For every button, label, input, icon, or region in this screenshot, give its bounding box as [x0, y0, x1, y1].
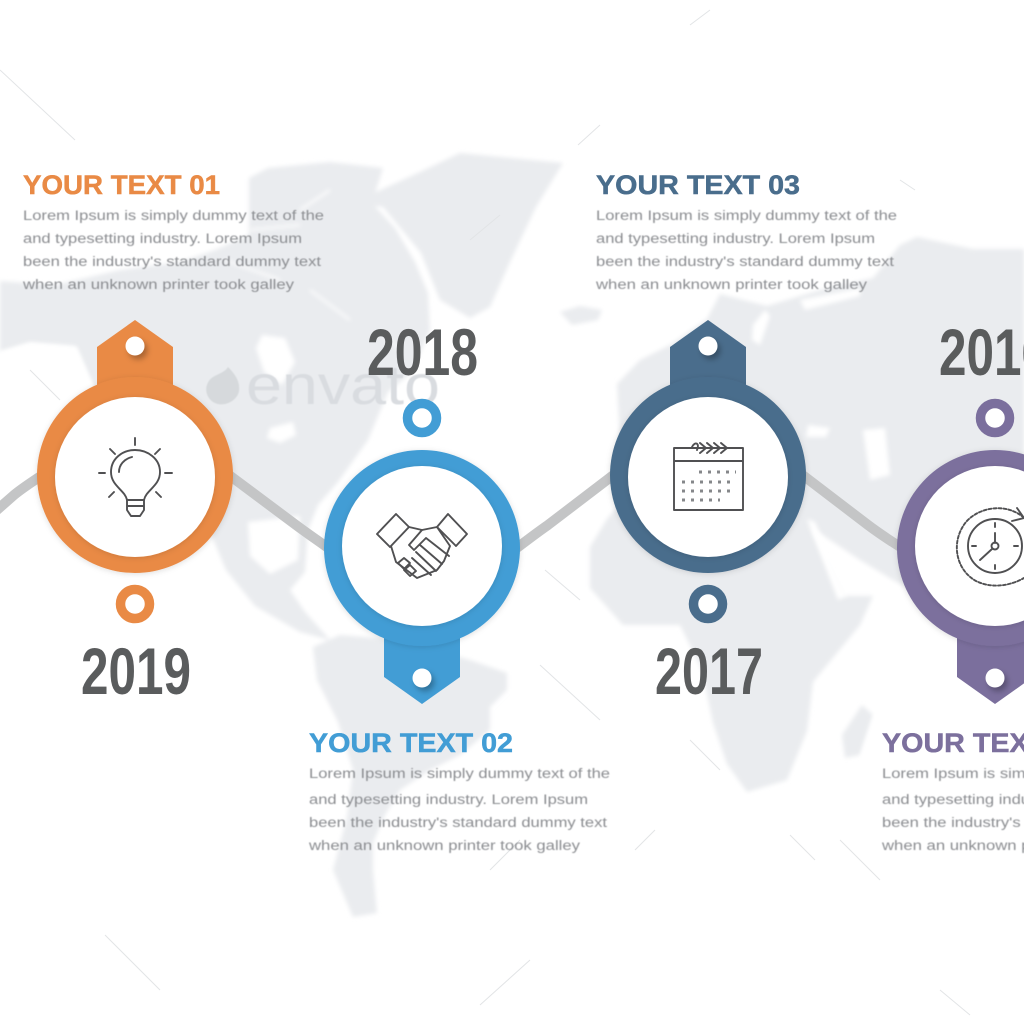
icon: light bulb: [99, 438, 172, 516]
tag hole: [412, 668, 432, 688]
map: iceland: [560, 306, 602, 325]
body copy 01: and typesetting industry. Lorem Ipsum: [23, 231, 302, 246]
map: coast details: [225, 190, 690, 500]
body copy 03: when an unknown printer took galley: [595, 277, 867, 292]
tag: orange top: [97, 320, 173, 410]
map: africa: [590, 480, 873, 792]
map: greenland: [352, 153, 563, 318]
disc: white: [55, 397, 215, 557]
step 4: 2016 purple: [881, 315, 1024, 853]
disc: white: [342, 466, 502, 626]
body copy 01: been the industry's standard dummy text: [23, 254, 321, 269]
ring: purple: [897, 450, 1024, 646]
disc: white: [915, 466, 1024, 626]
watermark: envato: [206, 353, 440, 416]
marker ring: navy: [694, 590, 722, 618]
body copy 04: [881, 766, 1024, 853]
step 3: 2017 navy: [595, 170, 897, 708]
text block 4: [881, 728, 1024, 853]
text block 3: [595, 170, 897, 292]
body copy 02: [308, 766, 610, 853]
map: north america: [0, 162, 430, 640]
text block 2: [308, 728, 610, 853]
tag: blue bottom: [384, 620, 460, 704]
tag: purple bottom: [957, 620, 1024, 704]
watermark word: envato: [246, 353, 440, 416]
connector line: [0, 470, 910, 553]
body copy 02: when an unknown printer took galley: [308, 838, 580, 853]
tag hole: [986, 668, 1004, 688]
tag hole: [126, 336, 144, 356]
body copy 01: [22, 208, 324, 292]
text block 1: [22, 170, 324, 292]
body copy 03: Lorem Ipsum is simply dummy text of the: [596, 208, 897, 223]
watermark leaf: [206, 367, 239, 404]
year: 2017: 2017: [655, 634, 763, 708]
map: madagascar: [842, 705, 873, 758]
year: 2018: 2018: [367, 315, 478, 389]
year: 2019: 2019: [81, 634, 191, 708]
marker ring: purple: [980, 404, 1010, 432]
body copy 02: and typesetting industry. Lorem Ipsum: [309, 792, 588, 807]
step 1: 2019 orange: [22, 170, 324, 708]
heading 01: YOUR TEXT 01: [23, 170, 220, 200]
icon: handshake: [377, 514, 467, 578]
heading 03: YOUR TEXT 03: [596, 170, 800, 200]
map: eurasia: [617, 237, 1024, 660]
disc: white: [628, 397, 788, 557]
tag: navy top: [670, 320, 746, 410]
marker ring: orange: [120, 590, 150, 618]
marker ring: blue: [408, 404, 436, 432]
map: white inland seas and lakes: [0, 288, 1024, 760]
world map: [0, 153, 1024, 917]
calendar frame: [674, 443, 743, 510]
body copy 02: Lorem Ipsum is simply dummy text of the: [309, 766, 610, 781]
icon: calendar: [674, 443, 743, 510]
body copy 03: [595, 208, 897, 292]
calendar dots: [682, 472, 736, 500]
body copy 02: been the industry's standard dummy text: [309, 815, 607, 830]
ring: navy: [610, 377, 806, 573]
ring: blue: [324, 450, 520, 646]
body copy 03: and typesetting industry. Lorem Ipsum: [596, 231, 875, 246]
heading 02: YOUR TEXT 02: [309, 728, 513, 758]
tag hole: [698, 336, 718, 356]
ring: orange: [37, 377, 233, 573]
icon: clock: [957, 508, 1024, 586]
body copy 03: been the industry's standard dummy text: [596, 254, 894, 269]
body copy 01: Lorem Ipsum is simply dummy text of the: [23, 208, 324, 223]
body copy 01: when an unknown printer took galley: [22, 277, 294, 292]
step 2: 2018 blue: [308, 315, 610, 853]
map: south america: [313, 635, 507, 917]
